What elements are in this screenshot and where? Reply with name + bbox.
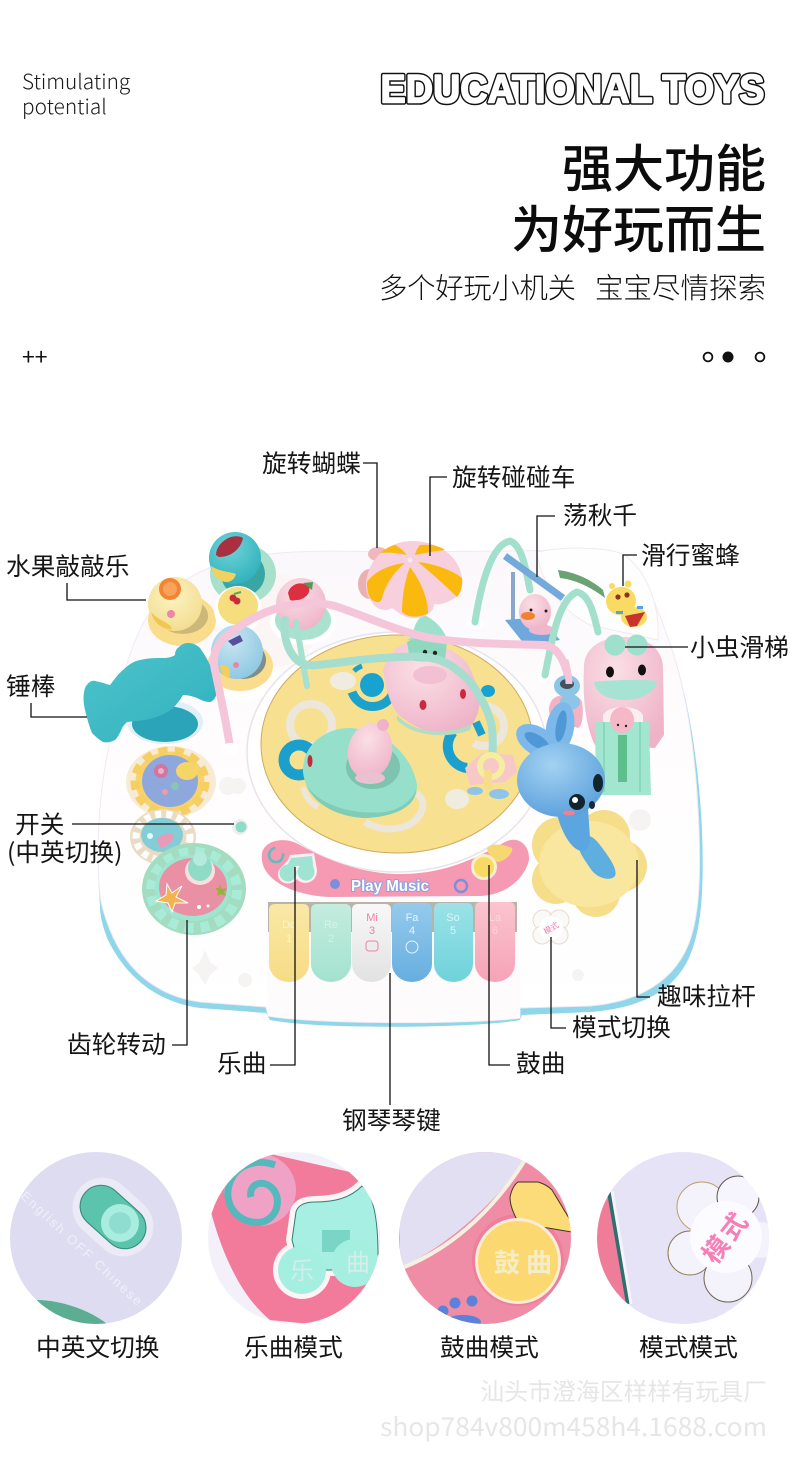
bunny head [517, 743, 605, 817]
callout: 滑行蜜蜂: 滑行蜜蜂 [641, 536, 740, 572]
wire post base [221, 743, 239, 755]
callout: 水果敲敲乐 [6, 547, 146, 600]
callout: 鼓曲: 鼓曲 [516, 1044, 565, 1080]
key fa: 4 [409, 925, 415, 937]
teal note button [278, 853, 317, 883]
whack-a-fruit game [148, 532, 336, 702]
key la: 6 [492, 925, 498, 937]
decoration: plus marks: ++ [22, 338, 48, 372]
text: Stimulating potential: Stimulating [22, 65, 131, 95]
detail photo: drum mode button [399, 1152, 572, 1329]
watermark [380, 1372, 767, 1444]
slide track and bee [558, 570, 647, 627]
callout: 趣味拉杆: 趣味拉杆 [657, 977, 756, 1013]
watermark: shop784v800m458h4.1688.com [380, 1408, 767, 1444]
strawberry ball [276, 578, 326, 630]
key re: Re [324, 919, 338, 931]
callout: 小虫滑梯: 小虫滑梯 [690, 628, 789, 664]
callout: 滑行蜜蜂 [623, 536, 740, 586]
detail photo: music mode button [208, 1152, 382, 1326]
bunny ears [510, 717, 564, 765]
key so: 5 [450, 925, 456, 937]
bead butterfly [465, 753, 517, 799]
swing set [466, 541, 598, 682]
subtitle: 宝宝尽情探索 [595, 266, 766, 307]
callout: 荡秋千 [537, 496, 637, 577]
text: Stimulating potential: potential [22, 90, 107, 120]
key do: 1 [286, 933, 292, 945]
music banner [262, 840, 529, 897]
watermark: 汕头市澄海区样样有玩具厂 [480, 1372, 767, 1407]
text: Stimulating potential [22, 65, 131, 120]
callout: 鼓曲 [489, 865, 565, 1080]
teal bead wire [284, 620, 493, 760]
mode button: 模式 [542, 920, 561, 937]
key mi: Mi [366, 912, 378, 924]
detail photo: language switch [10, 1152, 182, 1324]
swirl [269, 848, 283, 862]
key re: 2 [328, 933, 334, 945]
key mi [352, 904, 391, 982]
key fa: Fa [406, 912, 419, 924]
detail photo: music mode button: 乐 [290, 1251, 314, 1286]
white ring [247, 632, 547, 872]
gear 3 green with knob [142, 843, 246, 935]
subtitle [379, 266, 766, 307]
piano frame [266, 899, 520, 1022]
hammer [84, 643, 217, 744]
callout: 水果敲敲乐: 水果敲敲乐 [6, 547, 129, 583]
orange ball [148, 577, 202, 631]
subtitle: 多个好玩小机关 [379, 266, 576, 307]
pink bumper car [383, 615, 480, 735]
title: 为好玩而生 [511, 189, 766, 263]
blue ball [211, 625, 263, 679]
title [511, 128, 766, 263]
music note [330, 879, 340, 889]
callout: 开关: 开关 [15, 805, 64, 841]
gear 1 yellow [126, 746, 216, 818]
callout: 开关: (中英切换) [7, 833, 122, 869]
callout: 模式切换 [551, 937, 671, 1044]
detail photo: music mode button: 曲 [346, 1243, 370, 1278]
key re [311, 904, 351, 982]
callout: 乐曲 [217, 867, 295, 1080]
caption: 乐曲模式: 乐曲模式 [244, 1328, 343, 1364]
green car with pink bear [303, 719, 417, 818]
key do: Do [282, 919, 296, 931]
callout: 锤棒 [6, 667, 87, 717]
piano keys [266, 899, 520, 1022]
callout: 荡秋千: 荡秋千 [563, 496, 637, 532]
lever base [532, 810, 647, 917]
callout: 旋转蝴蝶: 旋转蝴蝶 [262, 444, 361, 480]
teal apple ball [209, 532, 261, 584]
fruit sockets [148, 544, 336, 702]
pink bead wire [214, 603, 569, 747]
heading: EDUCATIONAL TOYS: EDUCATIONAL TOYS [380, 68, 764, 112]
toy activity table [84, 532, 703, 1027]
detail photo: mode button [597, 1152, 778, 1324]
paw swirl [455, 880, 467, 892]
mode button [533, 910, 569, 944]
key la [475, 902, 515, 982]
callout: 趣味拉杆 [637, 860, 756, 1013]
key fa [392, 903, 432, 982]
top-right slide plate [537, 548, 658, 640]
key do [269, 904, 309, 982]
callout: 齿轮转动 [67, 920, 187, 1061]
callout: 开关 [7, 805, 234, 869]
language switch [232, 819, 248, 835]
embossed decorations [192, 777, 651, 987]
play music text: Play Music [351, 878, 429, 895]
play music text: Play Music [351, 878, 429, 895]
key so: So [446, 912, 460, 924]
callout: 锤棒: 锤棒 [6, 667, 55, 703]
wire bead [549, 660, 583, 728]
callout: 乐曲: 乐曲 [217, 1044, 266, 1080]
key mi: 3 [369, 925, 375, 937]
detail photo: language switch: English OFF Chinese [18, 1188, 145, 1308]
blue bunny lever [510, 700, 647, 917]
bunny neck [556, 808, 590, 851]
key la: La [489, 912, 502, 924]
detail photo: mode button: 模式 [692, 1202, 757, 1270]
umbrella spinner [358, 541, 462, 618]
stem leaves [407, 615, 447, 640]
callout: 钢琴琴键: 钢琴琴键 [342, 1101, 441, 1137]
yellow note button [472, 845, 512, 879]
detail photo: drum mode button: 曲 [526, 1243, 552, 1280]
table top surface [98, 550, 700, 1023]
detail photo: drum mode button: 鼓 [494, 1243, 520, 1280]
disc pattern: rings [284, 666, 507, 829]
callout: 模式切换: 模式切换 [572, 1008, 671, 1044]
decoration: pagination dots [704, 352, 764, 362]
callout: 旋转碰碰车: 旋转碰碰车 [452, 458, 575, 494]
key so [434, 903, 473, 982]
callout: 旋转蝴蝶 [262, 444, 377, 548]
yellow disc [261, 635, 533, 853]
table base [98, 550, 703, 1027]
center turntable [247, 632, 547, 872]
heading: EDUCATIONAL TOYS: EDUCATIONAL TOYS [380, 68, 764, 112]
callout: 齿轮转动: 齿轮转动 [67, 1025, 166, 1061]
cherry ball [218, 587, 258, 625]
callout: 旋转碰碰车 [430, 458, 575, 556]
gear 2 white [130, 809, 196, 865]
title: 强大功能 [562, 128, 766, 202]
caption: 鼓曲模式: 鼓曲模式 [440, 1328, 539, 1364]
caption: 中英文切换: 中英文切换 [36, 1328, 159, 1364]
caption: 模式模式: 模式模式 [639, 1328, 738, 1364]
slide house [584, 634, 664, 795]
